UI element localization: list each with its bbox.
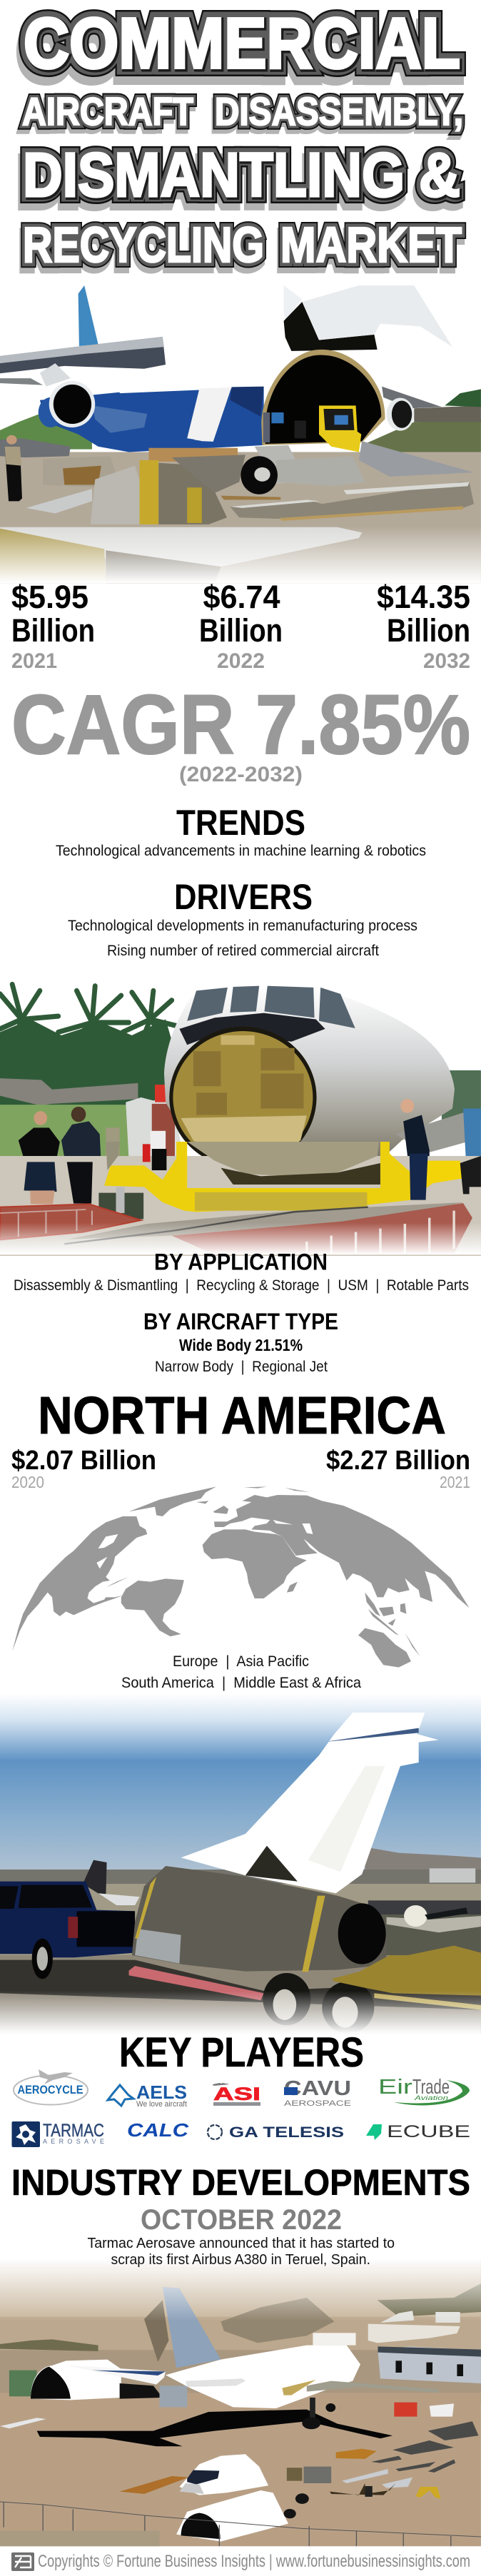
yellow scrap — [331, 1946, 481, 1996]
title line: DISMANTLING &: DISMANTLING — [21, 148, 402, 217]
logo: EirTrade Aviation: Eir — [378, 2076, 412, 2099]
trends text: Technological advancements in machine learning & robotics — [56, 843, 426, 859]
workers legs — [19, 1162, 57, 1192]
value 2032: $14.35 — [377, 579, 470, 615]
title line: DISMANTLING &: DISMANTLING — [24, 142, 406, 211]
logo: ASI: ASI — [213, 2084, 260, 2104]
market values — [11, 579, 470, 673]
photo: tail section on trailer — [0, 1694, 481, 2034]
driver text one: Technological developments in remanufacturing process — [68, 918, 417, 934]
title line: AIRCRAFT DISASSEMBLY, — [21, 89, 463, 138]
palm trees — [0, 984, 176, 1058]
fuselage section — [176, 2490, 288, 2542]
white hangar — [31, 2360, 121, 2400]
logo: Tarmac Aerosave: TARMAC — [43, 2121, 104, 2141]
title line: AIRCRAFT DISASSEMBLY,: AIRCRAFT — [22, 89, 193, 133]
driver text two: Rising number of retired commercial aircraft — [107, 943, 379, 959]
aircraft shadow — [37, 2410, 393, 2446]
containers and tires — [287, 2468, 302, 2481]
aircraft tail fin — [181, 1713, 439, 1893]
logo: GA Telesis — [208, 2124, 344, 2141]
value 2022: Billion — [199, 612, 283, 649]
title line: DISMANTLING &: DISMANTLING — [23, 141, 405, 210]
workers upper bodies — [19, 1127, 60, 1166]
cargo and debris — [148, 448, 238, 462]
footer — [11, 2552, 470, 2571]
red ramps — [0, 1204, 141, 1239]
north america 2020 value: $2.07 Billion — [11, 1446, 156, 1476]
value 2021: 2021 — [11, 649, 57, 673]
by application heading: BY APPLICATION — [154, 1249, 328, 1274]
title line: DISMANTLING &: & — [417, 148, 458, 217]
cradle wheels — [98, 1193, 143, 1219]
trends heading: TRENDS — [176, 803, 305, 843]
aircraft segments: Narrow Body | Regional Jet — [155, 1359, 328, 1375]
logo: Tarmac Aerosave: AEROSAVE — [43, 2138, 104, 2145]
cockpit windows — [187, 986, 355, 1028]
icon: Fortune Business Insights logo — [11, 2552, 34, 2571]
logo: CALC: CALC — [127, 2119, 189, 2141]
title line: AIRCRAFT DISASSEMBLY,: AIRCRAFT — [21, 93, 192, 138]
value 2032 — [377, 579, 470, 673]
jet body — [132, 1866, 387, 1972]
north america 2021 value: $2.27 Billion — [326, 1446, 470, 1476]
value 2021: Billion — [11, 612, 95, 649]
logo: CAVU Aerospace: AEROSPACE — [284, 2099, 351, 2108]
pickup truck — [0, 1882, 134, 1957]
title line: DISMANTLING &: DISMANTLING — [23, 141, 405, 210]
value 2032: 2032 — [423, 649, 470, 673]
north america 2020 value: 2020 — [11, 1473, 44, 1491]
red equipment — [394, 2403, 417, 2417]
perimeter fence — [0, 2502, 481, 2546]
title line: RECYCLING MARKET: RECYCLING — [21, 223, 263, 278]
value 2022: 2022 — [217, 649, 265, 673]
value 2022 — [199, 579, 283, 673]
CAGR period: (2022-2032) — [179, 763, 303, 786]
aircraft fuselage — [40, 387, 264, 452]
development text line two: scrap its first Airbus A380 in Teruel, Spain. — [111, 2252, 370, 2268]
trailer — [129, 1966, 264, 2000]
yellow cradle frame — [104, 1142, 411, 1212]
key players heading: KEY PLAYERS — [119, 2029, 364, 2076]
logo: AELS: AELS — [136, 2081, 187, 2103]
title line: RECYCLING MARKET — [21, 217, 462, 278]
logo: ASI — [213, 2083, 260, 2106]
ramp — [359, 441, 474, 477]
title line: RECYCLING MARKET: RECYCLING — [23, 217, 264, 273]
title line: RECYCLING MARKET: RECYCLING — [23, 217, 264, 273]
logo: GA Telesis: GA TELESIS — [229, 2124, 344, 2141]
development text line one: Tarmac Aerosave announced that it has started to — [87, 2236, 395, 2251]
logo: EirTrade Aviation: Trade — [412, 2076, 450, 2099]
by aircraft type heading: BY AIRCRAFT TYPE — [143, 1309, 338, 1334]
fuselage underside — [187, 1142, 379, 1176]
other regions line one: Europe | Asia Pacific — [173, 1653, 309, 1670]
value 2022: $6.74 — [203, 579, 280, 615]
title line: AIRCRAFT DISASSEMBLY,: AIRCRAFT — [22, 89, 193, 133]
title line: RECYCLING MARKET: RECYCLING — [23, 217, 264, 273]
cockpit section — [179, 2454, 268, 2495]
fuselage — [164, 986, 455, 1175]
upper part of photo — [0, 984, 481, 1195]
logo: Aerocycle: AEROCYCLE — [17, 2083, 83, 2096]
logo: Tarmac Aerosave — [11, 2121, 104, 2147]
propeller plane — [387, 1916, 481, 1932]
title line: AIRCRAFT DISASSEMBLY,: AIRCRAFT — [22, 89, 193, 133]
logo: CAVU Aerospace — [284, 2077, 351, 2108]
north america heading: NORTH AMERICA — [38, 1386, 446, 1445]
title line: DISMANTLING &: & — [419, 141, 460, 210]
world map — [12, 1486, 470, 1668]
logo: EirTrade Aviation: Aviation — [414, 2094, 448, 2101]
right building — [378, 2346, 481, 2383]
forklift and workers — [319, 405, 361, 452]
value 2021 — [11, 579, 95, 673]
logo: Aerocycle — [14, 2069, 88, 2105]
logo: AELS: We love aircraft — [136, 2100, 187, 2109]
foreground wing — [0, 527, 362, 567]
logo: ecube: ECUBE — [387, 2122, 470, 2141]
title line: DISMANTLING &: & — [420, 142, 462, 211]
title — [21, 4, 463, 278]
logo: CAVU Aerospace: CAVU — [284, 2077, 351, 2100]
logo: ecube — [366, 2122, 470, 2141]
cargo opening and nose door — [284, 285, 302, 321]
scattered parts — [0, 2418, 46, 2428]
north america 2021 value: 2021 — [440, 1473, 470, 1491]
north america 2020 value — [11, 1446, 156, 1491]
logo: AELS — [108, 2081, 187, 2109]
value 2021: $5.95 — [11, 579, 88, 615]
development date: OCTOBER 2022 — [141, 2204, 342, 2236]
opened nose bulkhead — [169, 1027, 317, 1168]
title line: DISMANTLING &: DISMANTLING — [23, 141, 405, 210]
title line: DISMANTLING &: & — [419, 141, 460, 210]
wing and tail — [79, 285, 98, 346]
north america 2021 value — [326, 1446, 470, 1491]
drivers heading: DRIVERS — [174, 877, 313, 917]
wide body share: Wide Body 21.51% — [179, 1336, 303, 1354]
logo: EirTrade Aviation — [378, 2076, 470, 2105]
engine — [39, 397, 63, 427]
other regions line two: South America | Middle East & Africa — [121, 1675, 361, 1691]
title line: DISMANTLING &: & — [419, 141, 460, 210]
white aircraft — [66, 2365, 166, 2385]
photo: aircraft nose section on yellow cradle — [0, 984, 481, 1256]
lower part of photo: cradle, workers, red ramps — [0, 1142, 481, 1256]
logos — [11, 2069, 470, 2147]
photo: cargo aircraft being unloaded — [0, 285, 481, 583]
photo: aircraft boneyard — [0, 2259, 481, 2546]
